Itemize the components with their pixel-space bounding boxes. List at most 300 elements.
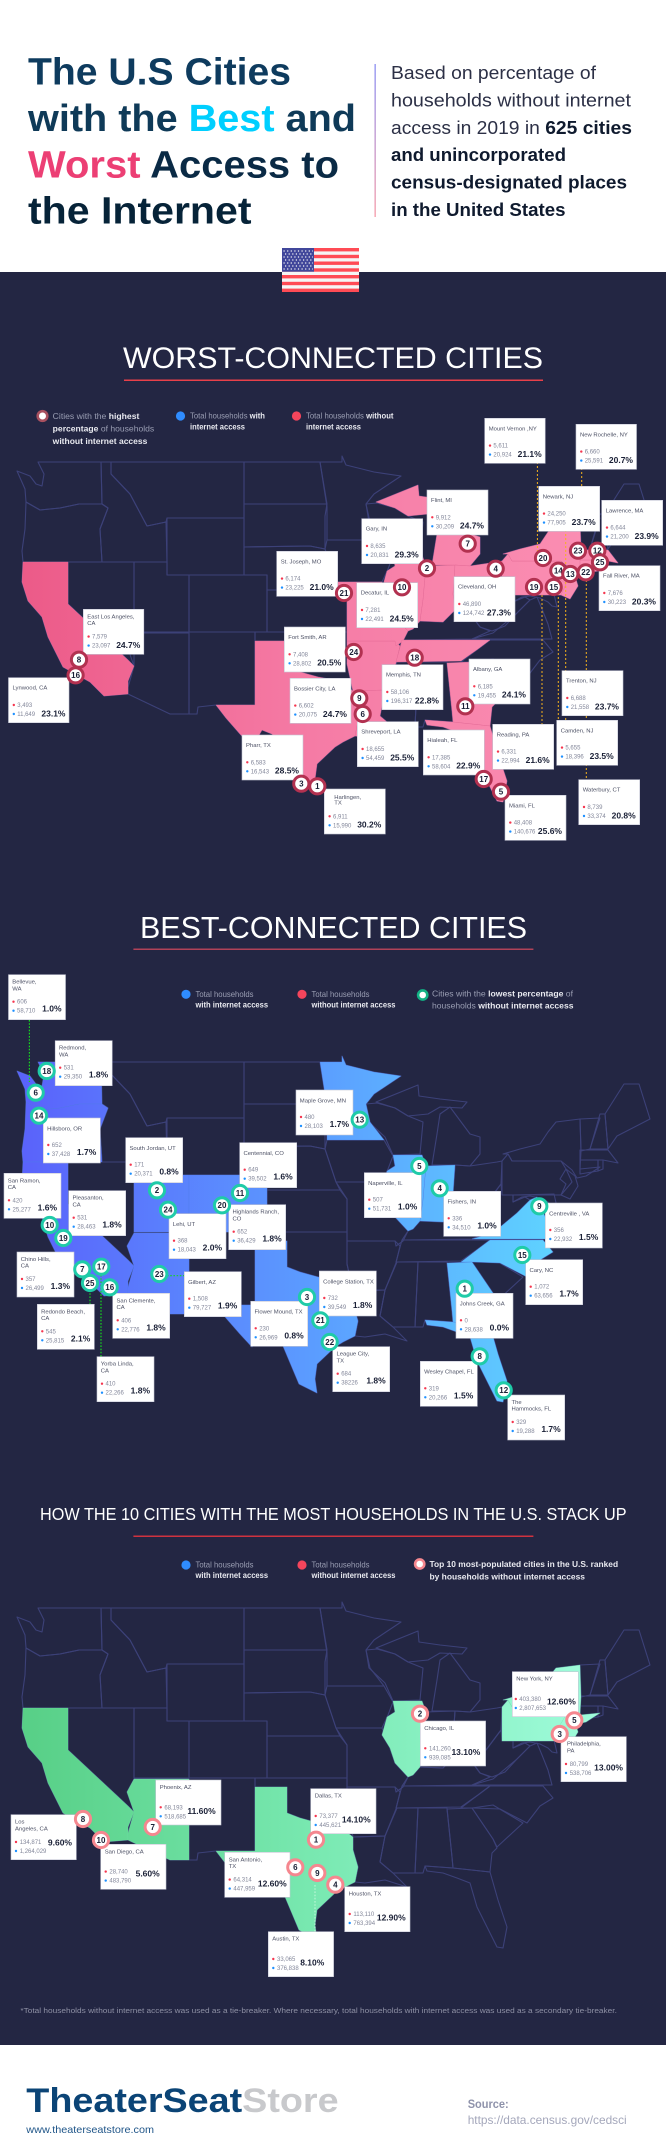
- card: Lynwood: 3,493: [17, 703, 33, 709]
- card: The Hammocks: 19,288: [516, 1429, 535, 1435]
- heading: best-connected cities: BEST-CONNECTED CITIES: [140, 910, 527, 945]
- card: Flint: Flint, MI: [431, 498, 452, 504]
- rank markers: worst-connected: 19: [530, 583, 539, 592]
- legend: ten largest cities: [181, 1559, 618, 1581]
- card: College Station: [319, 1271, 376, 1316]
- card: Los Angeles: Angeles, CA: [15, 1826, 48, 1832]
- rank markers: ten largest cities: 1: [314, 1836, 319, 1845]
- card: Newark: 24,250: [547, 512, 566, 518]
- card: Yorba Linda: 22,266: [106, 1391, 125, 1397]
- card: Yorba Linda: 1.8%: [131, 1386, 150, 1396]
- rank markers: ten largest cities: 10: [97, 1836, 106, 1845]
- card: League City: [333, 1347, 390, 1392]
- card: Chino Hills: 357: [26, 1277, 36, 1283]
- card: Cleveland: 46,890: [463, 602, 482, 608]
- card: Naperville: [364, 1173, 421, 1218]
- card: South Jordan: [126, 1138, 183, 1183]
- card: Pleasanton: 1.8%: [102, 1220, 122, 1230]
- card: Gilbert: 79,727: [193, 1306, 212, 1312]
- card: Bellevue: [8, 975, 66, 1020]
- header title: [27, 51, 356, 232]
- map: best-connected states: [17, 1056, 650, 1402]
- card: New Rochelle: New Rochelle, NY: [580, 432, 628, 438]
- card: San Antonio: 447,959: [233, 1887, 256, 1893]
- card: Bossier City: 6,602: [299, 704, 314, 710]
- card: San Clemente: San Clemente,: [116, 1298, 156, 1304]
- card: Decatur: 22,491: [365, 617, 384, 623]
- card: San Antonio: 12.60%: [258, 1878, 287, 1888]
- card: Phoenix: 11.60%: [187, 1806, 216, 1816]
- rank markers: best-connected: 16: [105, 1283, 115, 1292]
- card: New Rochelle: 25,591: [585, 459, 604, 465]
- card: Decatur: [357, 583, 418, 628]
- card: San Diego: [101, 1844, 166, 1889]
- rank markers: worst-connected: 10: [398, 583, 407, 592]
- rank markers: best-connected: 24: [164, 1206, 173, 1215]
- card: East Los Angeles: 7,579: [92, 635, 108, 641]
- heading: ten largest cities: HOW THE 10 CITIES WITH THE MOST HOUSEHOLDS IN THE U.S. STACK UP: [40, 1504, 627, 1524]
- legend: worst-connected: [38, 410, 394, 446]
- card: Austin: 8.10%: [300, 1958, 325, 1968]
- card: Fort Smith: 28,802: [293, 661, 312, 667]
- legend: best-connected: households without internet access: [432, 1001, 574, 1011]
- card: San Ramon: CA: [8, 1185, 16, 1191]
- footnote: *Total households without internet access was used as a tie-breaker. Where necessary, total households with internet access was used as a secondary tie-breaker.: [20, 2006, 617, 2015]
- leader lines: worst-connected: [537, 462, 586, 780]
- card: Naperville: Naperville, IL: [368, 1181, 403, 1187]
- footer logo: TheaterSeat Store: [26, 2082, 339, 2120]
- card: Fort Smith: 20.5%: [317, 658, 342, 668]
- card: Fishers: [444, 1191, 501, 1236]
- rank markers: ten largest cities: 8: [81, 1815, 86, 1824]
- card: Johns Creek: Johns Creek, GA: [460, 1302, 505, 1308]
- card: Gilbert: 1.9%: [218, 1301, 238, 1311]
- card: Dallas: Dallas, TX: [315, 1794, 342, 1800]
- header description: and unincorporated: [391, 145, 566, 165]
- rank markers: worst-connected: 13: [566, 570, 575, 579]
- card: Flower Mound: [251, 1301, 308, 1346]
- card: Wesley Chapel: 20,266: [429, 1395, 448, 1401]
- header title: with the Best and: [27, 98, 356, 140]
- card: Redondo Beach: [37, 1304, 94, 1349]
- legend: ten largest cities: by households without internet access: [430, 1571, 585, 1581]
- rank markers: worst-connected: 12: [593, 547, 602, 556]
- card: Centreville: [545, 1203, 602, 1248]
- card: Dallas: 445,621: [319, 1823, 342, 1829]
- card: San Diego: 5.60%: [136, 1868, 160, 1878]
- card: Lehi: Lehi, UT: [173, 1222, 195, 1228]
- card: Camden: 5,655: [565, 746, 581, 752]
- card: Chino Hills: 26,499: [26, 1286, 45, 1292]
- card: Memphis: Memphis, TN: [386, 673, 421, 679]
- card: The Hammocks: [508, 1395, 565, 1440]
- card: Centreville: Centreville , VA: [549, 1211, 589, 1217]
- rank markers: best-connected: 22: [325, 1338, 335, 1347]
- card: Bellevue: Bellevue,: [12, 980, 37, 986]
- card: Philadelphia: [561, 1737, 626, 1782]
- card: San Clemente: 22,776: [121, 1327, 140, 1333]
- header description: census-designated places: [391, 172, 627, 192]
- card: Harlingen: [324, 789, 385, 834]
- rank markers: best-connected: [28, 1063, 547, 1398]
- card: Shreveport: 54,459: [366, 756, 385, 762]
- legend: ten largest cities: Total households: [196, 1559, 254, 1569]
- card: Reading: 21.6%: [526, 755, 550, 765]
- header title: the Internet: [28, 190, 252, 232]
- card: Albany: 24.1%: [502, 690, 526, 700]
- card: Decatur: Decatur, IL: [361, 591, 390, 597]
- rank markers: best-connected: 9: [537, 1202, 542, 1211]
- card: St. Joseph: 23,225: [285, 586, 304, 592]
- card: Maple Grove: 1.7%: [330, 1119, 349, 1129]
- card: Mount Vernon: 21.1%: [518, 449, 542, 459]
- card: Flower Mound: Flower Mound, TX: [254, 1310, 303, 1316]
- rank markers: worst-connected: 8: [77, 656, 82, 665]
- card: Mount Vernon: Mount Vernon ,NY: [489, 426, 537, 432]
- rank markers: best-connected: 14: [35, 1112, 44, 1121]
- card: Lehi: 2.0%: [203, 1243, 222, 1253]
- card: Centreville: 356: [554, 1228, 564, 1234]
- card: Hillsboro: 1.7%: [77, 1147, 97, 1157]
- card: College Station: 39,549: [328, 1305, 347, 1311]
- card: Harlingen: TX: [334, 800, 342, 806]
- card: Hillsboro: 37,428: [52, 1152, 71, 1158]
- card: New Rochelle: 20.7%: [609, 455, 633, 465]
- card: Phoenix: Phoenix, AZ: [160, 1785, 192, 1791]
- card: East Los Angeles: [83, 609, 144, 654]
- card: New Rochelle: [576, 424, 636, 469]
- card: New York: 2,807,653: [519, 1706, 547, 1712]
- card: Centreville: 1.5%: [579, 1232, 599, 1242]
- legend: best-connected: without internet access: [311, 1000, 396, 1010]
- legend: best-connected: [181, 989, 574, 1011]
- card: College Station: 1.8%: [353, 1300, 373, 1310]
- card: Shreveport: 18,655: [366, 747, 385, 753]
- card: Flower Mound: 26,969: [259, 1335, 278, 1341]
- map: worst-connected states: [17, 456, 650, 802]
- card: Lawrence: 6,644: [610, 526, 626, 532]
- rank markers: best-connected: 20: [218, 1201, 227, 1210]
- card: Fall River: 30,223: [608, 600, 627, 606]
- card: Fall River: 20.3%: [632, 596, 656, 606]
- card: Hialeah: Hialeah, FL: [427, 738, 458, 744]
- card: Wesley Chapel: [420, 1361, 477, 1406]
- card: San Antonio: San Antonio,: [229, 1857, 262, 1863]
- rank markers: ten largest cities: 7: [150, 1823, 155, 1832]
- rank markers: best-connected: 11: [236, 1189, 245, 1198]
- card: Memphis: 22.8%: [415, 695, 439, 705]
- card: Gary: Gary, IN: [366, 527, 387, 533]
- card: College Station: 732: [328, 1296, 338, 1302]
- card: Bellevue: 1.0%: [42, 1004, 62, 1014]
- card: Houston: Houston, TX: [349, 1892, 381, 1898]
- card: Gary: 29.3%: [395, 549, 419, 559]
- rank markers: ten largest cities: 6: [293, 1863, 298, 1872]
- header title: The U.S Cities: [28, 51, 291, 93]
- card: San Diego: 28,740: [109, 1870, 128, 1876]
- card: Miami: 48,408: [514, 821, 533, 827]
- card: College Station: College Station, TX: [323, 1279, 374, 1285]
- card: San Diego: San Diego, CA: [105, 1849, 144, 1855]
- card: Fort Smith: Fort Smith, AR: [288, 635, 327, 641]
- rank markers: best-connected: 15: [518, 1251, 527, 1260]
- card: Redmond: 1.8%: [89, 1070, 109, 1080]
- card: Fall River: Fall River, MA: [603, 574, 640, 580]
- card: San Ramon: 420: [12, 1198, 23, 1204]
- card: Flint: 24.7%: [460, 521, 484, 531]
- card: Chicago: 13.10%: [451, 1747, 481, 1757]
- legend: worst-connected: without internet access: [52, 436, 148, 446]
- card: Lynwood: 23.1%: [41, 708, 66, 718]
- card: San Clemente: 406: [121, 1318, 132, 1324]
- card: Wesley Chapel: 1.5%: [454, 1390, 474, 1400]
- card: Cary: Cary, NC: [530, 1268, 554, 1274]
- card: Naperville: 507: [373, 1198, 383, 1204]
- card: Newark: 77,905: [547, 521, 566, 527]
- card: Philadelphia: PA: [567, 1748, 574, 1754]
- card: Camden: [557, 720, 618, 765]
- rank markers: worst-connected: 15: [549, 583, 559, 592]
- header description: households without internet: [391, 90, 631, 110]
- card: The Hammocks: 1.7%: [541, 1424, 561, 1434]
- card: Fishers: 336: [452, 1216, 463, 1222]
- card: Camden: 18,396: [565, 755, 584, 761]
- card: Dallas: [311, 1789, 376, 1834]
- card: Yorba Linda: CA: [101, 1368, 109, 1374]
- card: Miami: 140,676: [514, 830, 536, 836]
- card: League City: 38226: [341, 1381, 359, 1387]
- card: Gary: 8,635: [370, 544, 386, 550]
- rank markers: best-connected: 2: [155, 1186, 160, 1195]
- card: Hialeah: [423, 730, 484, 775]
- card: Cleveland: [454, 577, 515, 622]
- card: Bellevue: 58,710: [17, 1009, 36, 1015]
- rank markers: worst-connected: 16: [71, 671, 81, 680]
- card: St. Joseph: 21.0%: [310, 582, 334, 592]
- card: Wesley Chapel: Wesley Chapel, FL: [424, 1370, 474, 1376]
- rank markers: worst-connected: 7: [465, 540, 470, 549]
- card: The Hammocks: The: [512, 1400, 522, 1406]
- card: St. Joseph: St. Joseph, MO: [281, 559, 322, 565]
- rank markers: best-connected: 13: [355, 1116, 365, 1125]
- card: Dallas: 73,377: [319, 1814, 338, 1820]
- card: Naperville: 51,731: [373, 1207, 392, 1213]
- card: Waterbury: 20.8%: [612, 810, 636, 820]
- card: Cleveland: Cleveland, OH: [458, 585, 496, 591]
- card: Cleveland: 124,742: [463, 611, 485, 617]
- card: Fall River: [599, 566, 660, 611]
- rank markers: worst-connected: 1: [315, 782, 320, 791]
- card: Pleasanton: Pleasanton,: [72, 1196, 104, 1202]
- card: Yorba Linda: [97, 1357, 154, 1402]
- card: Cary: 1.7%: [559, 1289, 579, 1299]
- cards: best-connected cities: [4, 975, 602, 1440]
- card: New Rochelle: 6,660: [585, 450, 600, 456]
- rank markers: ten largest cities: 9: [315, 1869, 320, 1878]
- icon: US flag: [282, 248, 359, 292]
- card: Los Angeles: Los: [15, 1820, 25, 1826]
- card: Albany: 6,185: [478, 684, 493, 690]
- card: Decatur: 24.5%: [390, 613, 414, 623]
- rank markers: worst-connected: 23: [574, 547, 583, 556]
- rank markers: worst-connected: 11: [461, 702, 470, 711]
- card: Reading: Reading, PA: [497, 732, 529, 738]
- card: San Clemente: CA: [116, 1305, 125, 1311]
- card: St. Joseph: 6,174: [285, 577, 301, 583]
- card: San Ramon: 1.6%: [38, 1202, 57, 1212]
- card: Mount Vernon: 20,924: [493, 453, 512, 459]
- card: Maple Grove: [296, 1090, 353, 1135]
- card: Highlands Ranch: CO: [232, 1216, 242, 1222]
- card: Waterbury: 8,739: [587, 805, 603, 811]
- card: San Antonio: 64,314: [233, 1878, 252, 1884]
- card: Albany: Albany, GA: [473, 667, 502, 673]
- card: Camden: Camden, NJ: [561, 728, 593, 734]
- card: New York: 12.60%: [547, 1697, 576, 1707]
- header description: [391, 63, 632, 220]
- rank markers: worst-connected: 20: [539, 554, 548, 563]
- card: Lynwood: [8, 678, 69, 723]
- rank markers: best-connected: 4: [437, 1184, 442, 1193]
- card: East Los Angeles: East Los Angeles,: [87, 614, 135, 620]
- card: Bossier City: 24.7%: [323, 709, 347, 719]
- rank markers: worst-connected: 21: [340, 589, 349, 598]
- header description: Based on percentage of: [391, 63, 597, 83]
- legend: best-connected: with internet access: [195, 1000, 268, 1010]
- rank markers: worst-connected: 2: [425, 564, 430, 573]
- card: Chicago: 141,260: [429, 1746, 451, 1752]
- card: Bellevue: WA: [12, 986, 22, 992]
- card: Trenton: 23.7%: [595, 701, 619, 711]
- card: Pharr: Pharr, TX: [246, 743, 271, 749]
- card: East Los Angeles: CA: [87, 621, 96, 627]
- rank markers: worst-connected: 25: [596, 558, 605, 567]
- card: Trenton: 21,558: [571, 705, 590, 711]
- legend: worst-connected: Total households without: [306, 410, 394, 420]
- rank markers: best-connected: 3: [305, 1293, 310, 1302]
- card: Houston: 113,110: [353, 1912, 375, 1918]
- card: Albany: 19,455: [478, 693, 497, 699]
- rank markers: best-connected: 7: [80, 1265, 85, 1274]
- card: Dallas: 14.10%: [342, 1815, 371, 1825]
- card: Highlands Ranch: Highlands Ranch,: [232, 1210, 279, 1216]
- card: League City: TX: [337, 1358, 344, 1364]
- card: Cary: 63,656: [534, 1294, 553, 1300]
- card: Redondo Beach: Redondo Beach,: [41, 1309, 85, 1315]
- rank markers: worst-connected: 17: [479, 775, 489, 784]
- card: Shreveport: [357, 722, 418, 767]
- card: Miami: Miami, FL: [509, 803, 536, 809]
- rank markers: best-connected: 1: [462, 1285, 467, 1294]
- card: Chicago: [420, 1721, 486, 1766]
- card: Austin: [268, 1932, 334, 1977]
- card: Johns Creek: [456, 1293, 513, 1338]
- card: Waterbury: 33,374: [587, 814, 606, 820]
- card: Redmond: 531: [64, 1066, 74, 1072]
- legend: worst-connected: Total households with: [190, 410, 265, 420]
- rank markers: ten largest cities: 3: [557, 1730, 562, 1739]
- rank markers: best-connected: 8: [477, 1352, 482, 1361]
- rank markers: ten largest cities: 4: [333, 1881, 338, 1890]
- card: San Clemente: [113, 1293, 170, 1338]
- card: Fall River: 7,676: [608, 591, 623, 597]
- rank markers: best-connected: 10: [45, 1221, 55, 1230]
- card: Naperville: 1.0%: [398, 1202, 418, 1212]
- rank markers: worst-connected: 14: [554, 567, 563, 576]
- card: Cleveland: 27.3%: [487, 607, 511, 617]
- card: Harlingen: 6,911: [333, 814, 348, 820]
- rank markers: best-connected: 25: [86, 1279, 95, 1288]
- card: Shreveport: 25.5%: [390, 752, 415, 762]
- card: Philadelphia: 80,799: [570, 1762, 589, 1768]
- card: Highlands Ranch: 652: [237, 1230, 248, 1236]
- card: Gilbert: 1,508: [193, 1297, 208, 1303]
- card: Johns Creek: 0: [464, 1318, 468, 1324]
- card: Newark: 23.7%: [572, 517, 596, 527]
- card: Shreveport: Shreveport, LA: [361, 730, 401, 736]
- card: Trenton: Trenton, NJ: [566, 679, 597, 685]
- card: Miami: 25.6%: [538, 826, 562, 836]
- legend: best-connected: Total households: [196, 989, 254, 999]
- card: Yorba Linda: Yorba Linda,: [101, 1362, 134, 1368]
- card: League City: League City,: [337, 1352, 369, 1358]
- card: Redmond: Redmond,: [59, 1046, 87, 1052]
- card: Albany: [469, 659, 530, 704]
- legend: best-connected: Total households: [312, 989, 370, 999]
- card: San Ramon: [4, 1173, 61, 1218]
- card: San Antonio: TX: [229, 1864, 236, 1870]
- card: Redmond: WA: [59, 1052, 68, 1058]
- rank markers: worst-connected: 18: [410, 654, 420, 663]
- card: Centreville: 22,932: [554, 1237, 573, 1243]
- card: Bellevue: 606: [17, 1000, 28, 1006]
- card: Mount Vernon: [485, 418, 545, 463]
- card: Los Angeles: 1,264,029: [20, 1849, 47, 1855]
- card: Austin: Austin, TX: [272, 1937, 299, 1943]
- card: Philadelphia: Philadelphia,: [567, 1742, 601, 1748]
- rank markers: best-connected: 18: [42, 1067, 52, 1076]
- card: Chino Hills: Chino Hills,: [21, 1257, 51, 1263]
- card: Yorba Linda: 410: [106, 1382, 116, 1388]
- map: ten largest cities states: [17, 1602, 650, 1948]
- card: Cary: 1,072: [534, 1285, 550, 1291]
- card: Centennial: 39,502: [248, 1177, 267, 1183]
- leader line: Austin: [314, 1885, 316, 1932]
- card: Houston: [345, 1887, 410, 1932]
- rank markers: worst-connected: 5: [499, 788, 504, 797]
- card: Redondo Beach: CA: [41, 1316, 49, 1322]
- card: Los Angeles: 134,871: [20, 1840, 42, 1846]
- legend: best-connected: Cities with the lowest percentage of: [432, 989, 574, 999]
- card: Lawrence: 21,200: [610, 535, 629, 541]
- card: Pharr: 28.5%: [275, 766, 299, 776]
- rank markers: worst-connected: [68, 536, 608, 799]
- card: Pharr: [242, 735, 303, 780]
- header description: in the United States: [391, 200, 566, 220]
- card: San Clemente: 1.8%: [146, 1322, 166, 1332]
- card: Harlingen: 30.2%: [357, 820, 382, 830]
- card: Johns Creek: 0.0%: [490, 1322, 509, 1332]
- card: Pharr: 6,583: [251, 760, 266, 766]
- card: Bossier City: [290, 678, 351, 723]
- card: Chicago: 939,085: [429, 1755, 451, 1761]
- card: Austin: 376,838: [277, 1966, 299, 1972]
- card: Hillsboro: Hillsboro, OR: [47, 1126, 82, 1132]
- card: Fishers: Fishers, IN: [448, 1200, 476, 1206]
- footer source: [468, 2097, 627, 2127]
- card: East Los Angeles: 23,097: [92, 644, 111, 650]
- card: Maple Grove: 28,103: [304, 1124, 324, 1130]
